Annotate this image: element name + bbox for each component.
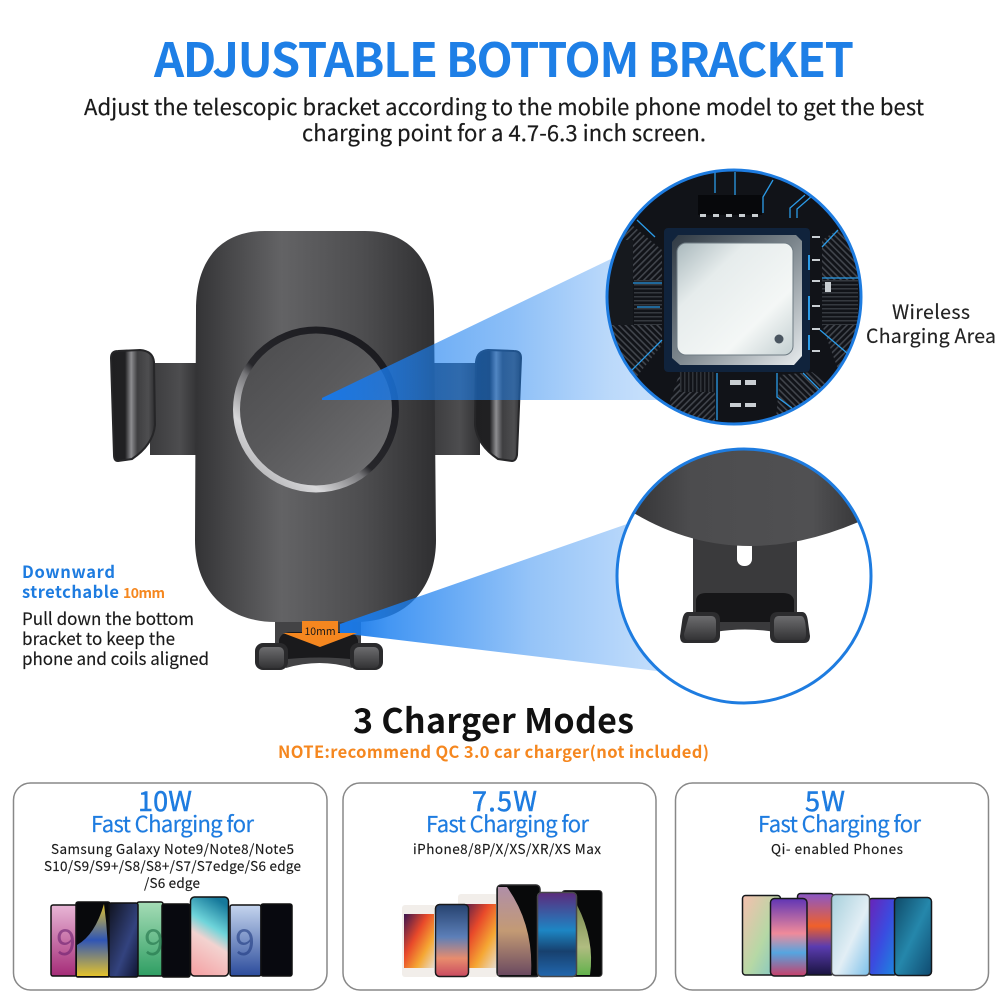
heading: 3 charger modes: 3 Charger Modes <box>353 694 634 743</box>
circle: bottom bracket detail <box>610 440 880 703</box>
circle border <box>607 170 861 424</box>
chip glowing surface <box>677 243 793 355</box>
wireless charging label <box>866 296 996 349</box>
note: NOTE:recommend QC 3.0 car charger(not included) <box>278 739 709 763</box>
panel: 5W <box>676 780 988 990</box>
panel: 7.5W <box>343 780 656 990</box>
beam to wireless charging circle <box>322 245 660 400</box>
orange arrow: 10mm: 10mm <box>304 624 336 639</box>
feet <box>680 612 720 643</box>
circle: wireless charging chip <box>607 170 865 430</box>
phones: Samsung: 9 <box>144 914 164 966</box>
wireless charging label: Wireless <box>892 296 970 325</box>
panel: 5W: Qi- enabled Phones <box>771 838 903 858</box>
blue circuit lines <box>632 172 860 420</box>
phones: Android <box>742 894 932 976</box>
orange arrow: 10mm <box>283 621 357 647</box>
panel: 5W: Fast Charging for <box>758 807 921 839</box>
phones: Samsung: 9 <box>235 914 255 966</box>
subtitle: charging point for a 4.7-6.3 inch screen. <box>302 116 706 148</box>
panel: 5W: 5W <box>805 780 845 819</box>
panel: 7.5W: 7.5W <box>472 780 537 819</box>
car mount device <box>111 231 521 670</box>
right arm <box>430 350 521 461</box>
panel: 10W: Samsung Galaxy Note9/Note8/Note5 <box>51 838 294 858</box>
chip pads <box>700 214 831 407</box>
cap <box>635 450 858 546</box>
callout: downward stretchable: Pull down the bottom <box>22 605 194 630</box>
callout: downward stretchable: phone and coils aligned <box>22 645 209 670</box>
callout: downward stretchable <box>22 559 209 670</box>
panel: 10W: S10/S9/S9+/S8/S8+/S7/S7edge/S6 edge <box>44 855 301 875</box>
circuit traces <box>608 195 865 430</box>
panel: 10W: Fast Charging for <box>91 807 254 839</box>
left arm <box>111 350 200 461</box>
mount body <box>195 231 436 622</box>
subtitle: Adjust the telescopic bracket according to the mobile phone model to get the best <box>84 90 924 122</box>
subtitle <box>84 90 924 148</box>
panel: 7.5W: iPhone8/8P/X/XS/XR/XS Max <box>413 838 601 858</box>
panel: 10W: /S6 edge <box>144 872 200 892</box>
panel: 10W: 10W <box>138 780 192 819</box>
phones: Samsung <box>51 897 292 977</box>
panel: 10W <box>14 780 327 990</box>
chip metal frame <box>672 235 802 365</box>
chip dot <box>774 334 784 344</box>
phones: Samsung: 9 <box>56 914 76 966</box>
title: ADJUSTABLE BOTTOM BRACKET <box>153 22 854 91</box>
beam to bracket circle <box>340 516 665 672</box>
slot <box>737 546 752 566</box>
wireless charging label: Charging Area <box>866 320 996 349</box>
cavity <box>696 593 794 625</box>
callout: downward stretchable: Downward <box>22 559 115 583</box>
callout: downward stretchable: bracket to keep the <box>22 625 175 650</box>
phones: iPhone <box>402 885 602 977</box>
callout: downward stretchable: 10mm <box>123 583 165 603</box>
panel: 7.5W: Fast Charging for <box>426 807 589 839</box>
callout: downward stretchable: stretchable <box>22 579 119 603</box>
charging ring <box>236 330 396 489</box>
bottom bracket <box>255 615 383 670</box>
stem <box>693 538 797 612</box>
